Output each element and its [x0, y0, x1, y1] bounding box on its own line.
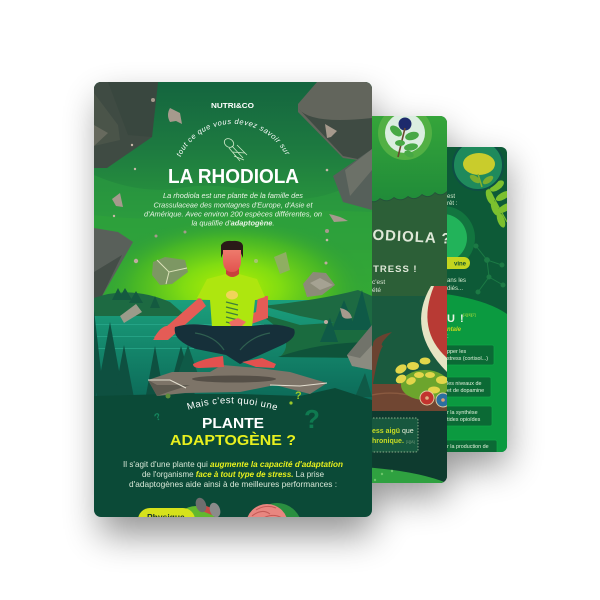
callout: dashed box: ess aigü que: [372, 428, 414, 435]
icon: dumbbell: [194, 496, 222, 519]
glow behind figure: [122, 229, 342, 300]
brain icon: [246, 503, 302, 553]
molecule network: [474, 244, 505, 294]
scene: dark forest: [372, 296, 447, 394]
paragraph: de l'organisme face à tout type de stress. La prise: [142, 470, 324, 479]
heading: plante adaptogene: [170, 415, 296, 449]
description: La rhodiola est une plante de la famille des: [163, 191, 303, 200]
rock: right middle: [333, 149, 372, 210]
question marks: ?: [295, 390, 302, 402]
list boxes: r la synthèse: [447, 410, 478, 416]
legs: [175, 324, 295, 364]
brand logo: NUTRI&CO: [211, 103, 255, 110]
medallion: berry plant: [378, 116, 432, 160]
list boxes: r la production de: [447, 444, 489, 450]
heading: back card: [447, 313, 476, 340]
icon: rhodiola sprig: [223, 137, 247, 161]
heading: plante adaptogene: ADAPTOGÈNE ?: [170, 432, 296, 449]
heading: plante adaptogene: PLANTE: [202, 415, 264, 432]
callout: dashed box: [372, 418, 418, 452]
banner arch: [421, 286, 447, 372]
face: [223, 250, 241, 272]
question marks: [153, 390, 320, 434]
green hill: [372, 468, 444, 483]
shirt: [197, 274, 265, 327]
physique pill with dumbbell: [138, 496, 222, 542]
subheading: stress: LE STRESS !: [348, 264, 418, 275]
body text: middle card: été: [372, 287, 381, 294]
lower bright green section: [447, 294, 507, 452]
hand: [229, 318, 246, 328]
circle: molecule background: [447, 206, 475, 270]
heading: rhodiola: LA RHODIOLA ?: [322, 224, 452, 248]
wooden boat: [372, 332, 447, 411]
list boxes: et de dopamine: [447, 388, 484, 394]
description: d'Amérique. Avec environ 200 espèces différentes, on: [144, 210, 322, 218]
list boxes: pper les: [447, 349, 466, 355]
fern leaves: [486, 180, 507, 228]
paragraph: d'adaptogènes aide ainsi à de meilleures performances :: [129, 480, 337, 489]
description: [144, 191, 322, 228]
shields: [420, 391, 450, 407]
hills and lake: [94, 290, 372, 400]
back card text: ans les: [447, 278, 466, 284]
back card text: diés...: [447, 286, 463, 292]
back card text: [447, 194, 466, 292]
arm left: [153, 297, 206, 340]
title: LA RHODIOLA: [168, 166, 299, 188]
list boxes: les niveaux de: [447, 381, 481, 387]
callout: dashed box: hronique. [1][A]: [372, 438, 415, 445]
pill: vine: [447, 257, 470, 269]
list boxes: tides opioïdes: [447, 417, 481, 423]
back card text: est: [447, 194, 455, 200]
pill: vine: vine: [454, 262, 467, 268]
body text: middle card: [372, 280, 386, 292]
hair: [221, 241, 243, 258]
small floating stones: [112, 98, 348, 241]
panel: main card: [94, 82, 372, 517]
medallion: yellow flower: [453, 140, 503, 190]
list boxes: [447, 344, 497, 452]
dark green body: [372, 192, 447, 296]
paragraph: [123, 460, 343, 489]
description: la qualifie d'adaptogène.: [192, 218, 274, 228]
heading: back card: ntale: [447, 327, 462, 333]
panel: back card: [447, 147, 507, 452]
rock: bottom left: [94, 228, 133, 298]
rock: top right: [298, 82, 372, 162]
subheading: curved: Mais c'est quoi une: [187, 397, 278, 410]
rock: bottom right: [347, 325, 372, 370]
rock: top left: [94, 82, 158, 168]
rock platform: [148, 365, 327, 396]
back card text: rêt :: [447, 201, 458, 207]
spine: rhodiola plant: [226, 290, 238, 325]
curved tagline: tout ce que vous devez savoir sur: [176, 118, 290, 157]
arm right: [236, 296, 268, 328]
figure: meditating man: [153, 241, 295, 368]
drop shadows: [100, 100, 507, 535]
neck: [226, 268, 239, 280]
trees: [94, 310, 195, 400]
feet: [193, 356, 224, 368]
heading: back card: [1][6][7]: [463, 313, 476, 317]
body text: middle card: c'est: [372, 279, 385, 286]
question marks: ?: [304, 404, 320, 434]
heading: back card: U !: [447, 313, 465, 325]
ground silhouette: [94, 388, 372, 400]
physique pill with dumbbell: Physique: [147, 512, 185, 522]
yellow flowers: [394, 358, 449, 400]
description: Crassulaceae des montagnes d'Europe, d'Asie et: [154, 200, 313, 210]
paragraph: Il s'agit d'une plante qui augmente la capacité d'adaptation: [123, 460, 343, 469]
lower dark band: [372, 411, 447, 483]
subheading: curved: [187, 397, 278, 410]
panel: middle card: [372, 116, 447, 483]
floating rocks: [152, 257, 188, 285]
list boxes: stress (cortisol...): [447, 356, 488, 362]
heading: back card: :: [447, 334, 449, 340]
wave bands: [94, 175, 248, 190]
green top with scalloped edge: [372, 116, 447, 202]
question marks: ?: [153, 411, 163, 424]
